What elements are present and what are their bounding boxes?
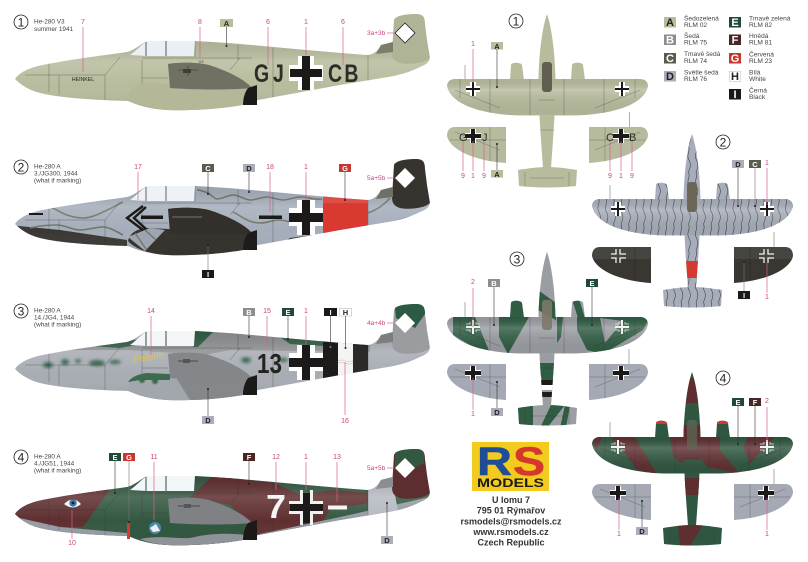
bar [328,506,347,510]
number 3 [510,252,524,266]
callouts: profile 2: I [207,270,209,279]
callouts: profile 2: 18 [266,164,274,171]
RS Models logo: S [513,440,545,484]
callouts: profile 4: E [112,453,118,462]
fuselage code GJ: GJ [254,60,288,88]
legend item D: RLM 76 [684,76,707,83]
callouts: top 1: 9 [608,173,612,180]
caption: profile 2: (what if marking) [34,178,81,184]
legend item D: Světle šedá [684,70,719,76]
legend item G [729,50,774,65]
callouts: top 3 [465,279,629,418]
caption: profile 1: 1 [18,16,25,30]
callouts: top 2 [610,160,774,301]
callouts: profile 3: I [329,308,332,317]
caption: profile 3: (what if marking) [34,322,81,328]
callouts: profile 1: 1 [304,19,308,26]
balkenkreuz [289,345,323,380]
planform: top 4 [592,372,793,546]
aircraft: profile 4 [15,449,430,546]
callouts: profile 3: 1 [304,308,308,315]
legend item H: Bílá [749,70,761,76]
underside wing panels 2 [592,247,793,283]
caption: profile 3: He-280 A [34,308,61,314]
callouts: profile 3: H [343,308,348,317]
legend item A: A [666,17,674,29]
fin diamond [395,168,415,188]
callouts: top 1: 9 [461,173,465,180]
legend item F: Hnědá [749,33,769,40]
callouts: profile 4 [68,453,394,547]
legend item H: H [731,71,739,83]
legend item I: Černá [749,86,767,94]
legend item H [729,70,766,83]
callouts: profile 2 [134,164,394,279]
callouts: profile 1 [81,19,394,72]
callouts: top 3: D [494,408,500,417]
callouts: profile 2: G [342,164,348,173]
legend item B: B [666,34,674,46]
legend item G: G [731,53,739,65]
address block [460,495,562,548]
callouts: profile 2: 5a+5b [367,175,386,182]
legend item A: RLM 02 [684,22,707,29]
caption: profile 4: (what if marking) [34,468,81,474]
callouts: profile 1: A [224,19,230,28]
wing crosses [466,82,629,96]
legend item I: I [733,89,737,101]
callouts: profile 4: F [247,453,252,462]
callouts: top 4: E [735,398,741,407]
legend item C: Tmavě šedá [684,51,721,58]
callouts: profile 4: 12 [272,454,280,461]
legend item E: Tmavě zelená [749,16,791,22]
callouts: top 2: 1 [765,160,769,167]
caption: profile 4 [14,450,81,474]
callouts: profile 1: 6 [266,19,270,26]
callouts: top 2: C [752,160,758,169]
legend item F: F [732,34,739,46]
nose art: Peterle [133,350,165,366]
callouts: profile 4: 1 [304,454,308,461]
callouts: profile 4: G [126,453,132,462]
planform: top 2 [592,134,793,308]
callouts: top 3: 2 [471,279,475,286]
legend item C [664,51,721,65]
address block: rsmodels@rsmodels.cz [460,516,562,526]
underside wing panels 1: C [606,132,614,144]
caption: profile 3: 3 [18,304,25,318]
caption: profile 2: 2 [18,160,25,174]
fin diamond [395,313,415,333]
callouts: profile 4: D [384,536,390,545]
legend item A: Šedozelená [684,14,719,22]
address block: www.rsmodels.cz [472,527,549,537]
aircraft: profile 2 [15,159,430,256]
aircraft: profile 1: V3 [199,59,204,64]
caption: profile 2 [14,160,81,184]
legend item D [664,70,719,83]
red fuselage band [323,196,368,234]
callouts: profile 3: D [205,416,211,425]
top view 3 [447,252,648,426]
caption: profile 3: 14./JG4, 1944 [34,314,75,322]
balkenkreuz [289,200,323,235]
legend item H: White [749,76,766,83]
legend item G: RLM 23 [749,58,772,65]
callouts: profile 3: 14 [147,308,155,315]
callouts: profile 3: 4a+4b [367,320,386,327]
caption: profile 4: 4./JG51, 1944 [34,460,75,468]
callouts: top 4: D [639,527,645,536]
fin diamond [395,458,415,478]
caption: profile 2: 3./JG300, 1944 [34,170,78,178]
callouts: profile 4: 11 [150,454,158,461]
top view 1 [447,14,648,188]
balkenkreuz [289,490,323,525]
legend item E: E [731,17,739,29]
top view 2 [592,134,793,308]
number 13: 13 [257,348,282,379]
number 2: 2 [720,136,727,150]
fuselage bands [323,341,338,378]
planform: top 1 [447,14,648,188]
legend item A [664,14,719,29]
callouts: profile 1: 8 [198,19,202,26]
callouts: profile 1: 7 [81,19,85,26]
underside wing panels 1: B [629,132,636,144]
aircraft: profile 3 [15,304,430,400]
caption: profile 1: summer 1941 [34,26,74,33]
legend item E [729,16,791,29]
profile 4: He-280 A 4./JG51 side view [14,449,430,546]
fuselage code CB: CB [328,60,361,88]
callouts: top 4: F [753,398,758,407]
legend [664,14,791,101]
underside wing panels 4 [592,484,793,520]
underside wing panels 3 [447,364,648,400]
balkenkreuz [289,56,323,90]
caption: profile 4: He-280 A [34,454,61,460]
callouts: profile 4: 5a+5b [367,465,386,472]
caption: profile 3 [14,304,81,328]
legend item I: Black [749,94,766,101]
callouts: top 1: A [494,170,500,179]
chevron and bars [127,206,146,230]
underside wing panels 1: G [459,132,468,144]
callouts: profile 2: C [205,164,211,173]
unit emblem [149,522,161,534]
number 3: 3 [514,252,521,266]
callouts: top 1 [461,41,634,180]
eye marking [64,499,81,508]
callouts: top 1: 1 [619,173,623,180]
number 2 [716,135,730,150]
callouts: top 2: 1 [765,294,769,301]
profile 2: He-280 A 3./JG300 side view [0,159,440,279]
callouts: top 2: D [735,160,741,169]
underside wing panels 1 [447,127,648,163]
callouts: top 2: I [743,291,745,300]
legend item C: RLM 74 [684,58,707,65]
callouts: profile 3 [147,308,394,425]
callouts: profile 1: 3a+3b [367,30,386,37]
legend item B [664,31,707,46]
legend item F: RLM 81 [749,40,772,46]
RS Models logo [472,440,549,491]
legend item D: D [666,71,674,83]
callouts: profile 4: 10 [68,540,76,547]
callouts: profile 3: 15 [263,308,271,315]
callouts: profile 3: E [285,308,291,317]
underside wing panels 1: J [482,132,488,144]
callouts: profile 1: 6 [341,19,345,26]
caption: profile 1: He-280 V3 [34,18,65,26]
callouts: profile 4: 13 [333,454,341,461]
callouts: top 4: 1 [617,531,621,538]
caption: profile 2: He-280 A [34,164,61,170]
profile 1: He-280 V3 side view [14,14,430,110]
callouts: top 1: 9 [630,173,634,180]
fin diamond [395,23,415,43]
number 4 [716,371,730,386]
callouts: top 4: 1 [765,531,769,538]
legend item G: Červená [749,50,774,58]
callouts: top 3: E [589,279,595,288]
nacelle tips [656,420,728,424]
callouts: profile 3: B [246,308,252,317]
address block: U lomu 7 [492,495,530,505]
aircraft: profile 1 [15,14,430,110]
legend item C: C [666,53,674,65]
caption: profile 4: 4 [18,450,25,464]
planform: top 3 [447,252,648,426]
legend item B: RLM 75 [684,40,707,46]
callouts: top 1: 9 [482,173,486,180]
callouts: top 1: 1 [471,41,475,48]
callouts: top 3: 1 [471,411,475,418]
callouts: profile 2: 1 [304,164,308,171]
callouts: top 3: B [491,279,497,288]
callouts: profile 3: 16 [341,418,349,425]
callouts: profile 2: 17 [134,164,142,171]
profile 3: He-280 A 14./JG4 side view [0,304,440,425]
legend item B: Šedá [684,31,700,40]
callouts: top 1: A [494,42,500,51]
address block: Czech Republic [477,538,545,548]
red fuselage band [686,261,698,278]
top view 4 [592,370,793,546]
callouts: top 1: 1 [471,173,475,180]
RS Models logo: MODELS [477,478,544,490]
number 7: 7 [266,488,286,525]
aircraft: profile 1: HEINKEL [72,77,94,83]
legend item F [729,33,772,46]
callouts: top 4: 2 [765,398,769,405]
number 1: 1 [513,14,520,28]
address block: 795 01 Rýmařov [477,506,545,516]
callouts: top 4 [610,398,774,538]
red nacelle lip [127,523,130,539]
legend item E: RLM 82 [749,22,772,29]
callouts: profile 2: D [246,164,252,173]
legend item I [729,86,767,101]
caption: profile 1 [14,15,74,33]
number 4: 4 [720,372,727,386]
RS Models logo: R [477,440,512,484]
number 1 [509,14,523,28]
